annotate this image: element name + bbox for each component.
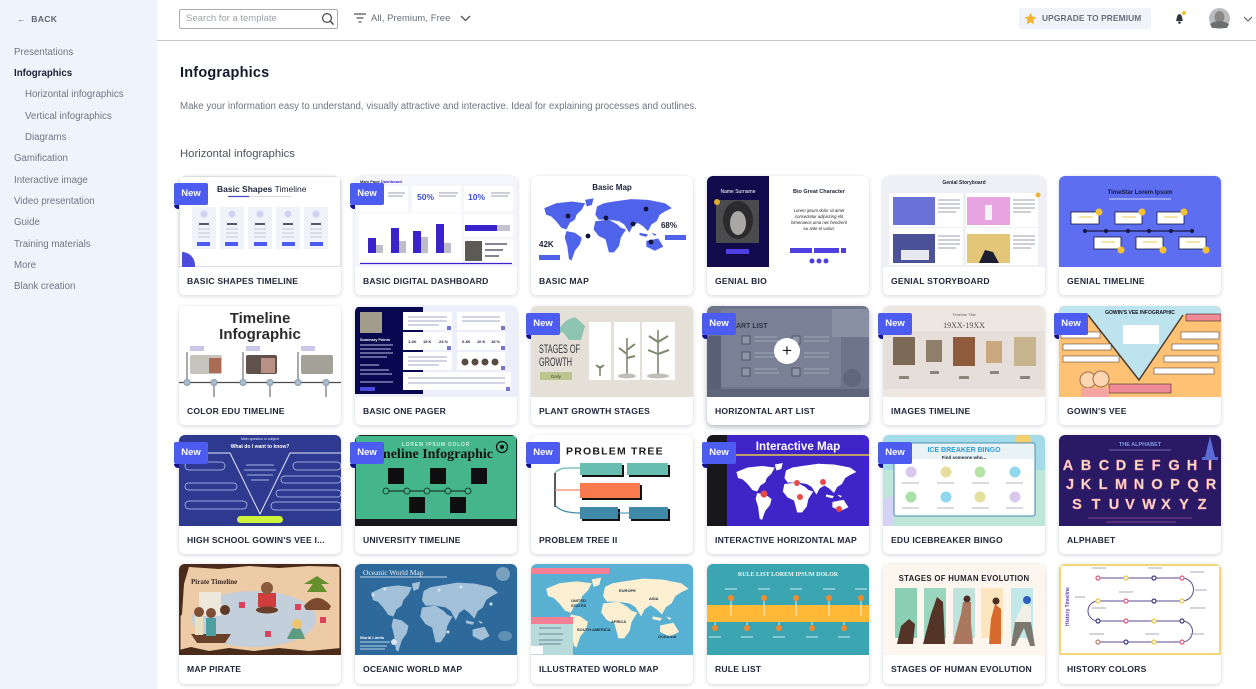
thumbnail: LOREM IPSUM DOLOR xyxy=(402,442,470,448)
label: INTERACTIVE HORIZONTAL MAP xyxy=(715,535,857,545)
thumbnail: M xyxy=(1115,477,1127,493)
nav: training materials: Training materials xyxy=(14,239,91,250)
thumbnail: J xyxy=(1066,477,1074,493)
card: map pirate xyxy=(179,564,341,684)
thumbnail: Find someone who... xyxy=(942,455,986,460)
label: GOWIN'S VEE xyxy=(1067,406,1127,416)
icon: filter xyxy=(354,13,366,23)
thumbnail: What do I want to know? xyxy=(231,444,289,450)
thumbnail: A xyxy=(1063,458,1074,474)
card: oceanic world map xyxy=(355,564,517,684)
thumbnail: AFRICA xyxy=(611,619,626,624)
thumbnail: RULE LIST LOREM IPSUM DOLOR xyxy=(738,572,839,578)
thumbnail xyxy=(355,435,517,526)
thumbnail xyxy=(883,564,1045,655)
thumbnail: EUROPE xyxy=(619,588,636,593)
label: ILLUSTRATED WORLD MAP xyxy=(539,664,659,674)
icon: star xyxy=(1024,12,1036,24)
thumbnail: consectetur adipiscing elit xyxy=(795,214,844,219)
page title: Infographics xyxy=(180,65,269,81)
thumbnail: 1.2K xyxy=(408,339,417,344)
card: basic digital dashboard xyxy=(355,176,517,295)
thumbnail: World Limits xyxy=(360,635,385,640)
thumbnail xyxy=(539,183,686,261)
thumbnail xyxy=(883,176,1045,267)
card: color edu timeline xyxy=(179,306,341,425)
thumbnail xyxy=(1059,435,1221,526)
thumbnail: X xyxy=(1161,497,1171,513)
thumbnail: Lorem ipsum dolor sit amet xyxy=(794,208,845,213)
thumbnail: STAGES OF xyxy=(539,342,580,356)
card: genial bio xyxy=(707,176,869,295)
badge: New xyxy=(533,318,553,329)
thumbnail: S xyxy=(1072,497,1082,513)
thumbnail: 15 K xyxy=(423,339,432,344)
thumbnail xyxy=(179,176,341,267)
nav: vertical infographics: Vertical infographics xyxy=(25,111,112,122)
search box xyxy=(179,9,338,29)
thumbnail xyxy=(883,306,1045,397)
label: PLANT GROWTH STAGES xyxy=(539,406,650,416)
avatar xyxy=(1209,8,1230,29)
thumbnail: OCEANIA xyxy=(658,634,677,639)
thumbnail: L xyxy=(1099,477,1108,493)
back link: ← BACK xyxy=(17,14,57,24)
thumbnail: Pirate Timeline xyxy=(191,578,237,586)
badge xyxy=(350,183,384,205)
thumbnail: Basic Shapes Timeline xyxy=(217,184,307,194)
icon: plus button: + xyxy=(782,341,792,360)
thumbnail: 68% xyxy=(661,221,677,230)
card: basic one pager xyxy=(355,306,517,425)
thumbnail: O xyxy=(1151,477,1163,493)
thumbnail: ICE BREAKER BINGO xyxy=(927,447,1001,454)
thumbnail: TimeStar Lorem Ipsum xyxy=(1108,190,1172,196)
label: BASIC MAP xyxy=(539,276,589,286)
thumbnail: himenaeos urna nec hendrerit xyxy=(791,220,848,225)
thumbnail: Interactive Map xyxy=(756,440,840,453)
label: STAGES OF HUMAN EVOLUTION xyxy=(891,664,1032,674)
section heading: Horizontal infographics xyxy=(180,148,295,160)
nav: presentations: Presentations xyxy=(14,47,73,58)
thumbnail: PROBLEM TREE xyxy=(566,446,664,458)
card: edu icebreaker bingo xyxy=(883,435,1045,554)
label: HIGH SCHOOL GOWIN'S VEE I... xyxy=(187,535,325,545)
thumbnail: G xyxy=(1168,458,1180,474)
badge: New xyxy=(357,188,377,199)
thumbnail xyxy=(707,435,869,526)
nav: gamification: Gamification xyxy=(14,153,68,164)
label: BASIC DIGITAL DASHBOARD xyxy=(363,276,489,286)
page description: Make your information easy to understand, visually attractive and interactive. Ideal for explaining processes and outlines. xyxy=(180,101,697,112)
thumbnail: B xyxy=(1081,458,1091,474)
thumbnail: E xyxy=(1134,458,1144,474)
badge xyxy=(174,442,208,464)
badge: New xyxy=(885,447,905,458)
badge: New xyxy=(709,318,729,329)
thumbnail xyxy=(1059,306,1221,397)
thumbnail: ART LIST xyxy=(736,323,768,330)
badge: New xyxy=(1061,318,1081,329)
thumbnail: History Timeline xyxy=(1065,587,1071,626)
thumbnail: 19XX-19XX xyxy=(943,321,985,330)
thumbnail xyxy=(554,446,670,521)
thumbnail: GOWIN'S VEE INFOGRAPHIC xyxy=(1105,310,1175,316)
thumbnail xyxy=(1059,176,1221,267)
label: MAP PIRATE xyxy=(187,664,241,674)
filter label: All, Premium, Free xyxy=(371,12,450,23)
label: BASIC SHAPES TIMELINE xyxy=(187,276,298,286)
nav: diagrams: Diagrams xyxy=(25,132,66,143)
thumbnail: I xyxy=(1208,458,1212,474)
thumbnail: R xyxy=(1206,477,1217,493)
thumbnail xyxy=(355,564,517,655)
badge: New xyxy=(181,447,201,458)
card: history colors xyxy=(1059,564,1221,684)
thumbnail: SOUTH AMERICA xyxy=(577,627,611,632)
label: GENIAL BIO xyxy=(715,276,767,286)
thumbnail: Infographic xyxy=(219,326,301,343)
thumbnail xyxy=(179,564,341,655)
card: images timeline xyxy=(883,306,1045,425)
card: interactive horizontal map xyxy=(707,435,869,554)
card: rule list xyxy=(707,564,869,684)
icon: account chevron xyxy=(1244,16,1252,22)
thumbnail: GROWTH xyxy=(539,355,572,369)
card: illustrated world map xyxy=(531,564,693,684)
thumbnail: 18 % xyxy=(491,339,501,344)
label: GENIAL STORYBOARD xyxy=(891,276,990,286)
thumbnail xyxy=(531,564,693,655)
card: genial timeline xyxy=(1059,176,1221,295)
label: IMAGES TIMELINE xyxy=(891,406,970,416)
badge xyxy=(702,442,736,464)
upgrade button: UPGRADE TO PREMIUM xyxy=(1042,13,1141,23)
thumbnail: Genial Storyboard xyxy=(942,180,986,186)
label: OCEANIC WORLD MAP xyxy=(363,664,462,674)
thumbnail: D xyxy=(1116,458,1126,474)
nav: blank creation: Blank creation xyxy=(14,281,75,292)
badge xyxy=(1054,313,1088,335)
thumbnail: U xyxy=(1109,497,1119,513)
thumbnail: 0.3K xyxy=(462,339,471,344)
badge xyxy=(350,442,384,464)
search box: Search for a template xyxy=(186,13,277,24)
badge: New xyxy=(885,318,905,329)
thumbnail: H xyxy=(1187,458,1197,474)
thumbnail xyxy=(355,176,517,267)
nav: video presentation: Video presentation xyxy=(14,196,95,207)
thumbnail: THE ALPHABET xyxy=(1119,442,1162,448)
thumbnail: Timeline xyxy=(230,310,290,327)
top bar xyxy=(157,0,1256,41)
thumbnail xyxy=(707,564,869,655)
badge: New xyxy=(181,188,201,199)
thumbnail: T xyxy=(1092,497,1101,513)
card: genial storyboard xyxy=(883,176,1045,295)
card: gowin's vee xyxy=(1059,306,1221,425)
badge: New xyxy=(709,447,729,458)
label: GENIAL TIMELINE xyxy=(1067,276,1145,286)
nav: more: More xyxy=(14,260,36,271)
thumbnail: Bio Great Character xyxy=(793,189,846,195)
thumbnail: 24 % xyxy=(439,339,449,344)
thumbnail xyxy=(531,306,693,397)
thumbnail: STATES xyxy=(571,603,587,608)
thumbnail xyxy=(179,435,341,526)
thumbnail: 42K xyxy=(539,240,554,249)
label: EDU ICEBREAKER BINGO xyxy=(891,535,1003,545)
card: stages of human evolution xyxy=(883,564,1045,684)
nav: interactive image: Interactive image xyxy=(14,175,88,186)
thumbnail: 50% xyxy=(417,192,434,202)
thumbnail: Y xyxy=(1179,497,1189,513)
thumbnail: P xyxy=(1170,477,1180,493)
label: PROBLEM TREE II xyxy=(539,535,617,545)
thumbnail: Daily xyxy=(551,374,562,379)
thumbnail: UNITED xyxy=(571,598,586,603)
thumbnail: Oceanic World Map xyxy=(363,568,424,577)
label: COLOR EDU TIMELINE xyxy=(187,406,285,416)
card: alphabet xyxy=(1059,435,1221,554)
badge xyxy=(526,442,560,464)
thumbnail: Z xyxy=(1198,497,1207,513)
thumbnail: Q xyxy=(1187,477,1199,493)
thumbnail xyxy=(707,306,869,397)
nav: guide: Guide xyxy=(14,217,40,228)
thumbnail: Summary Points xyxy=(360,338,390,342)
card: basic map xyxy=(531,176,693,295)
thumbnail: Timeline Title xyxy=(952,312,976,317)
card: university timeline xyxy=(355,435,517,554)
card: high school gowin's vee xyxy=(179,435,341,554)
thumbnail: Main question or subject xyxy=(241,437,279,441)
thumbnail: ASIA xyxy=(649,596,659,601)
badge xyxy=(174,183,208,205)
thumbnail: Name Surname xyxy=(720,189,756,195)
thumbnail xyxy=(355,306,517,397)
thumbnail: W xyxy=(1142,497,1156,513)
nav: infographics active: Infographics xyxy=(14,68,72,79)
thumbnail: F xyxy=(1152,458,1161,474)
card: plant growth stages xyxy=(531,306,693,425)
icon: magnifier xyxy=(322,13,334,26)
sidebar xyxy=(0,0,157,689)
badge xyxy=(702,313,736,335)
label: UNIVERSITY TIMELINE xyxy=(363,535,461,545)
badge xyxy=(878,313,912,335)
thumbnail: C xyxy=(1099,458,1110,474)
card: horizontal art list (hover state) xyxy=(707,306,869,425)
thumbnail: Timeline Infographic xyxy=(366,447,493,462)
thumbnail: K xyxy=(1081,477,1092,493)
thumbnail: eu ante et varius xyxy=(804,226,835,231)
label: HORIZONTAL ART LIST xyxy=(715,406,815,416)
thumbnail: 10 K xyxy=(477,339,486,344)
thumbnail xyxy=(883,435,1045,526)
thumbnail: Main Page Dashboard xyxy=(360,179,402,184)
thumbnail: V xyxy=(1125,497,1135,513)
icon: plus button xyxy=(774,338,800,364)
upgrade button xyxy=(1019,8,1151,29)
thumbnail: N xyxy=(1134,477,1144,493)
thumbnail: 10% xyxy=(468,192,485,202)
label: ALPHABET xyxy=(1067,535,1115,545)
nav: horizontal infographics: Horizontal infographics xyxy=(25,89,124,100)
card: problem tree ii xyxy=(531,435,693,554)
icon: chevron xyxy=(460,16,470,22)
badge xyxy=(526,313,560,335)
thumbnail: Basic Map xyxy=(592,183,632,192)
card: basic shapes timeline xyxy=(179,176,341,295)
icon: bell xyxy=(1176,11,1186,24)
badge: New xyxy=(357,447,377,458)
thumbnail: STAGES OF HUMAN EVOLUTION xyxy=(899,574,1029,583)
thumbnail xyxy=(179,310,341,397)
label: HISTORY COLORS xyxy=(1067,664,1147,674)
badge xyxy=(878,442,912,464)
label: RULE LIST xyxy=(715,664,761,674)
badge: New xyxy=(533,447,553,458)
thumbnail xyxy=(707,176,848,267)
thumbnail xyxy=(1059,564,1221,655)
label: BASIC ONE PAGER xyxy=(363,406,446,416)
